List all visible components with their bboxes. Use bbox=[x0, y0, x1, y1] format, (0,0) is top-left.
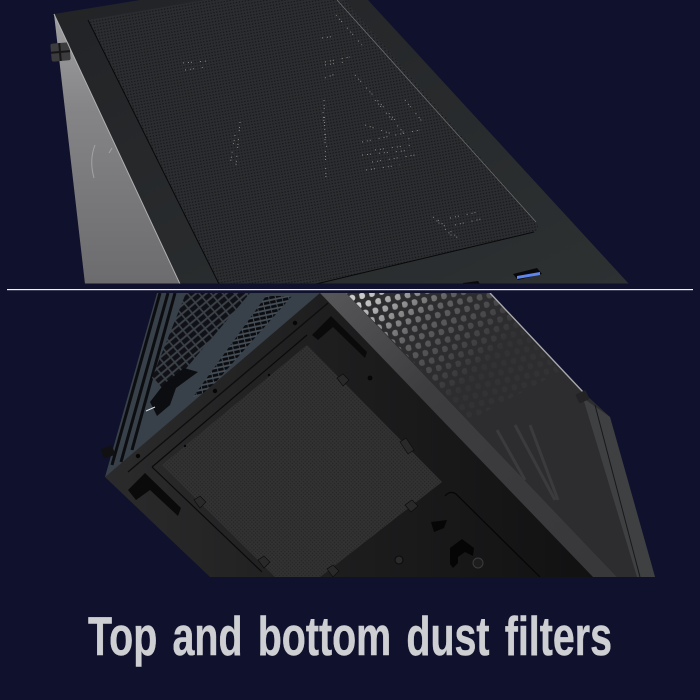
photo: case top with dust filter bbox=[50, 0, 629, 284]
case bottom face bbox=[105, 293, 617, 577]
top mesh dust filter bbox=[88, 0, 538, 284]
filter light edge bbox=[337, 0, 536, 222]
side panel lattice bbox=[152, 293, 250, 387]
divider line bbox=[7, 289, 693, 290]
sparkle highlights on filter bbox=[183, 15, 485, 240]
expansion brackets behind glass bbox=[497, 425, 558, 500]
glass edge highlight bbox=[54, 14, 180, 284]
power supply opening outline bbox=[445, 492, 540, 577]
filter dark edges bbox=[88, 20, 534, 284]
rear cutouts bbox=[395, 520, 483, 568]
side panel dark rails bbox=[112, 293, 175, 465]
honeycomb vent bbox=[346, 293, 516, 394]
cable highlight bbox=[146, 407, 155, 411]
filter clips bbox=[194, 374, 418, 577]
gray chassis band bbox=[320, 293, 617, 577]
side panel bbox=[105, 293, 340, 477]
bottom mesh dust filter bbox=[162, 345, 442, 577]
side glass panel bbox=[54, 14, 180, 284]
PSU cabling bbox=[150, 368, 198, 416]
vent slot shadow bbox=[463, 281, 480, 284]
USB port bbox=[513, 268, 542, 280]
rear rail bbox=[128, 303, 328, 472]
glass strip edge bbox=[595, 405, 640, 577]
right thumbscrew bbox=[576, 390, 589, 403]
filter groove bbox=[152, 335, 307, 572]
photo: case bottom with dust filter bbox=[101, 285, 655, 577]
top bezel bbox=[54, 0, 629, 284]
outer corner strip bbox=[583, 398, 655, 577]
screw holes bbox=[136, 321, 372, 458]
left thumbscrew bbox=[101, 446, 114, 458]
front glass panel bbox=[346, 293, 655, 577]
left foot handle bbox=[128, 473, 181, 516]
bright glass edge bbox=[490, 293, 583, 392]
right foot handle bbox=[312, 316, 367, 358]
fan reflection in glass bbox=[92, 145, 112, 178]
knob: thumbscrew bbox=[50, 42, 71, 62]
side panel vent slots bbox=[194, 296, 292, 396]
